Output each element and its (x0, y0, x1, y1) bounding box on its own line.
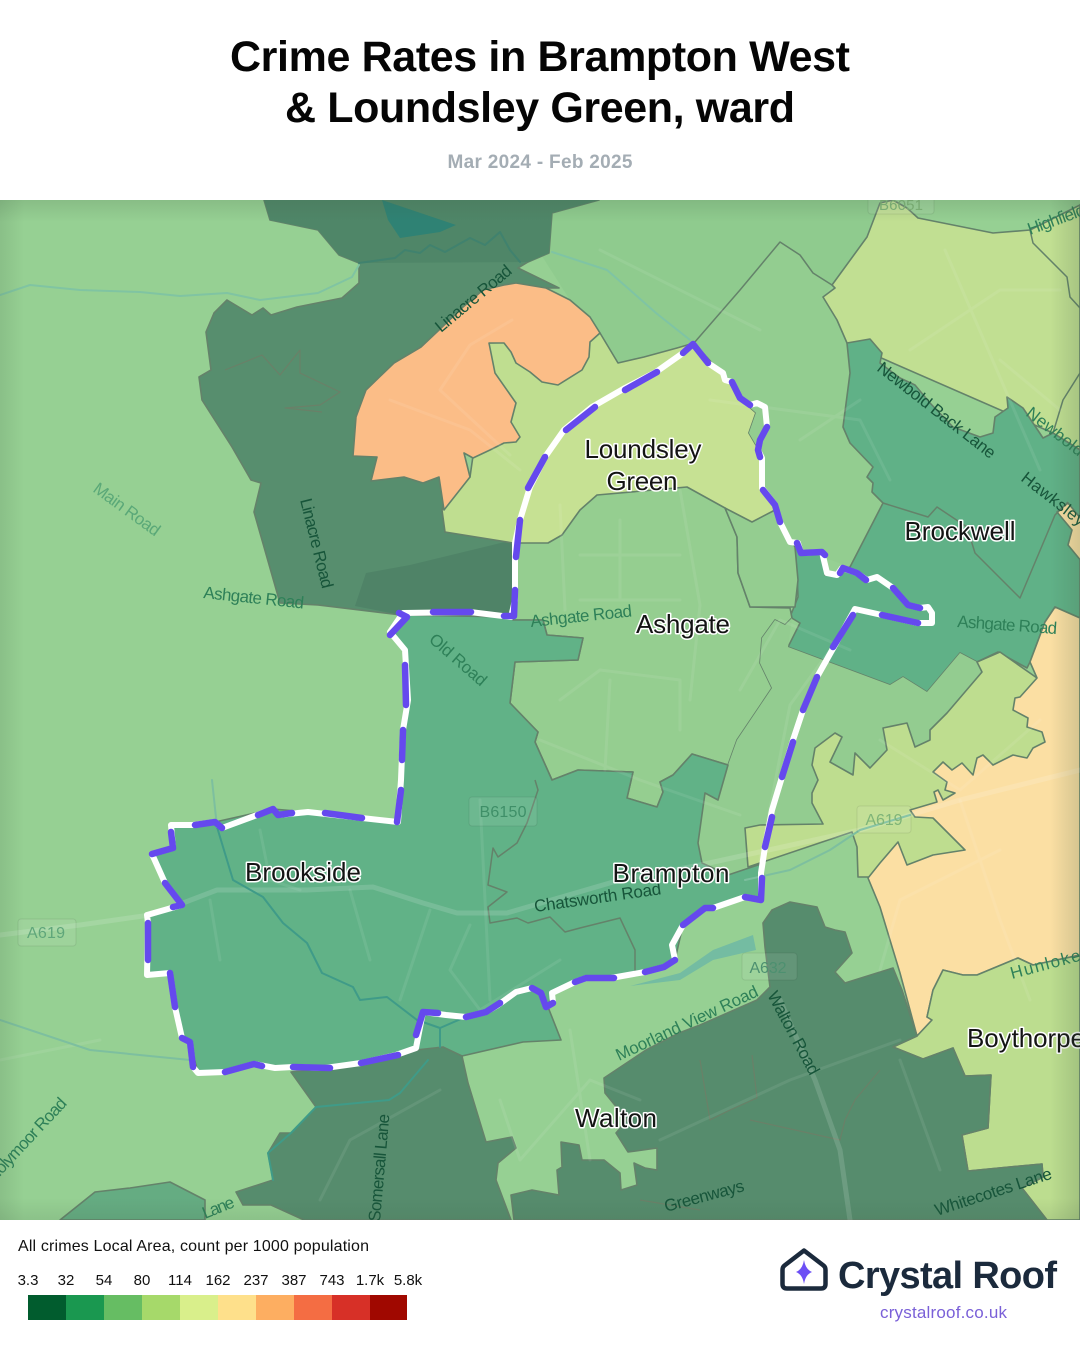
place label: Walton: Walton (575, 1103, 657, 1133)
road shield: A619 west (18, 919, 76, 946)
area: darker patch (355, 540, 513, 617)
road label: Old Road: Old Road (425, 630, 491, 690)
legend scale values: 32 (58, 1272, 74, 1289)
legend scale values: 5.8k (394, 1272, 423, 1289)
map detail: minor roads (0, 770, 1080, 1220)
road shield: A619 east: A619 (866, 812, 903, 829)
road shield: A632: A632 (750, 960, 787, 977)
place label: Loundsley Green (584, 434, 702, 496)
area: south-west dark tile (236, 1047, 516, 1220)
logo: Crystal Roof (782, 1250, 1057, 1322)
area: top darker forest (264, 200, 599, 263)
place label: Brookside: Brookside (245, 857, 361, 887)
legend scale values: 743 (319, 1272, 345, 1289)
legend title: All crimes Local Area, count per 1000 population (18, 1238, 369, 1255)
road label: Somersall Lane: Somersall Lane (365, 1113, 393, 1222)
road shield: A632 (742, 953, 797, 980)
area: lower-left medium tile (60, 1182, 205, 1220)
road label: Ashgate Road east: Ashgate Road (957, 612, 1058, 638)
title (230, 33, 850, 132)
road label: Chatsworth Road: Chatsworth Road (533, 879, 662, 916)
legend (18, 1238, 423, 1320)
road shield: B6051 (868, 190, 934, 214)
area: Brockwell medium-green tile (788, 339, 1080, 692)
river: along north (359, 232, 520, 263)
legend scale values (18, 1272, 423, 1289)
road label: Moorland View Road: Moorland View Road (613, 982, 761, 1065)
map detail: north-east boundaries (1030, 230, 1080, 433)
legend scale values: 114 (168, 1272, 192, 1289)
map panel (0, 190, 1080, 1223)
subtitle: date range: Mar 2024 - Feb 2025 (448, 152, 633, 173)
icon: house with star (782, 1250, 826, 1288)
road label: Whitecotes Lane: Whitecotes Lane (932, 1164, 1054, 1220)
map detail: inner dark tile boundaries (225, 350, 880, 1210)
area: north-east pale tiles (823, 200, 1080, 450)
place label: Brockwell: Brockwell (904, 516, 1016, 546)
area: yellow high-crime tile (868, 607, 1080, 1036)
legend scale values: 387 (281, 1272, 307, 1289)
area: tile between Ashgate and ward edge (728, 618, 976, 766)
road label: Linacre Road north: Linacre Road (431, 261, 516, 336)
area: north east mid-green tile (694, 242, 883, 567)
area: yellow Hawksley tile (1057, 503, 1080, 562)
road shield: B6150 (469, 797, 537, 826)
road label: Lane: Lane (199, 1193, 237, 1223)
area: Ashgate tile (510, 487, 792, 807)
legend scale values: 54 (96, 1272, 112, 1289)
river: west (0, 265, 359, 300)
area: lake by Brampton (630, 935, 756, 986)
area: north centre tile (540, 200, 880, 363)
legend scale values: 3.3 (18, 1272, 38, 1289)
logo url: crystalroof.co.uk (880, 1303, 1008, 1322)
area: orange high-crime tile (353, 283, 600, 510)
map detail: north-east tile outline (694, 242, 832, 343)
legend colour swatches (28, 1295, 407, 1320)
map edge vignette (0, 200, 1080, 1220)
road shield: A619 west: A619 (27, 925, 65, 942)
legend scale values: 1.7k (356, 1272, 385, 1289)
road label: Main Road: Main Road (90, 479, 164, 540)
area: Boythorpe light tile (893, 955, 1080, 1220)
logo wordmark: Crystal Roof (838, 1255, 1057, 1297)
map detail: Brampton and Brookside tile divider (488, 780, 635, 975)
road shield: A619 east (857, 806, 911, 833)
map detail: pale stream (0, 780, 910, 1060)
road label: Newbold Back Lane: Newbold Back Lane (874, 358, 999, 462)
legend scale values: 162 (205, 1272, 231, 1289)
title: Crime Rates in Brampton West (230, 33, 850, 81)
title: & Loundsley Green, ward (285, 84, 795, 132)
road label: Greenways: Greenways (662, 1176, 746, 1216)
water: lake (382, 200, 456, 238)
place label: Loundsley Green: Green (606, 466, 678, 496)
legend scale values: 80 (134, 1272, 150, 1289)
road label: Ashgate Road centre: Ashgate Road (529, 601, 633, 631)
place label: Brampton: Brampton (612, 858, 730, 888)
area: Brampton and Brookside medium-green tile (147, 615, 761, 1073)
map detail: Brockwell tile divider (883, 502, 1068, 598)
area: Walton dark tile (511, 902, 1047, 1220)
road label: Linacre Road west: Linacre Road (296, 496, 337, 590)
river: north centre (552, 252, 690, 340)
ward boundary: purple dashes (148, 344, 920, 1072)
area: north-west dark tile (199, 200, 599, 617)
road label: Ashgate Road west: Ashgate Road (203, 583, 305, 613)
road shield: B6150: B6150 (480, 804, 527, 821)
legend scale values: 237 (243, 1272, 269, 1289)
area: tile east of Ashgate (725, 508, 798, 607)
ward boundary: white line (147, 344, 932, 1073)
area: Loundsley light tile (442, 333, 775, 543)
road label: Walton Road: Walton Road (763, 988, 823, 1078)
place label: Ashgate: Ashgate (636, 609, 730, 639)
area: A619 light tile (745, 652, 1060, 877)
map detail: streams (217, 827, 470, 1180)
area: Loundsley interior inside ward (521, 384, 773, 542)
place label: Loundsley Green: Loundsley (584, 434, 702, 464)
road shield: B6051: B6051 (879, 197, 923, 214)
